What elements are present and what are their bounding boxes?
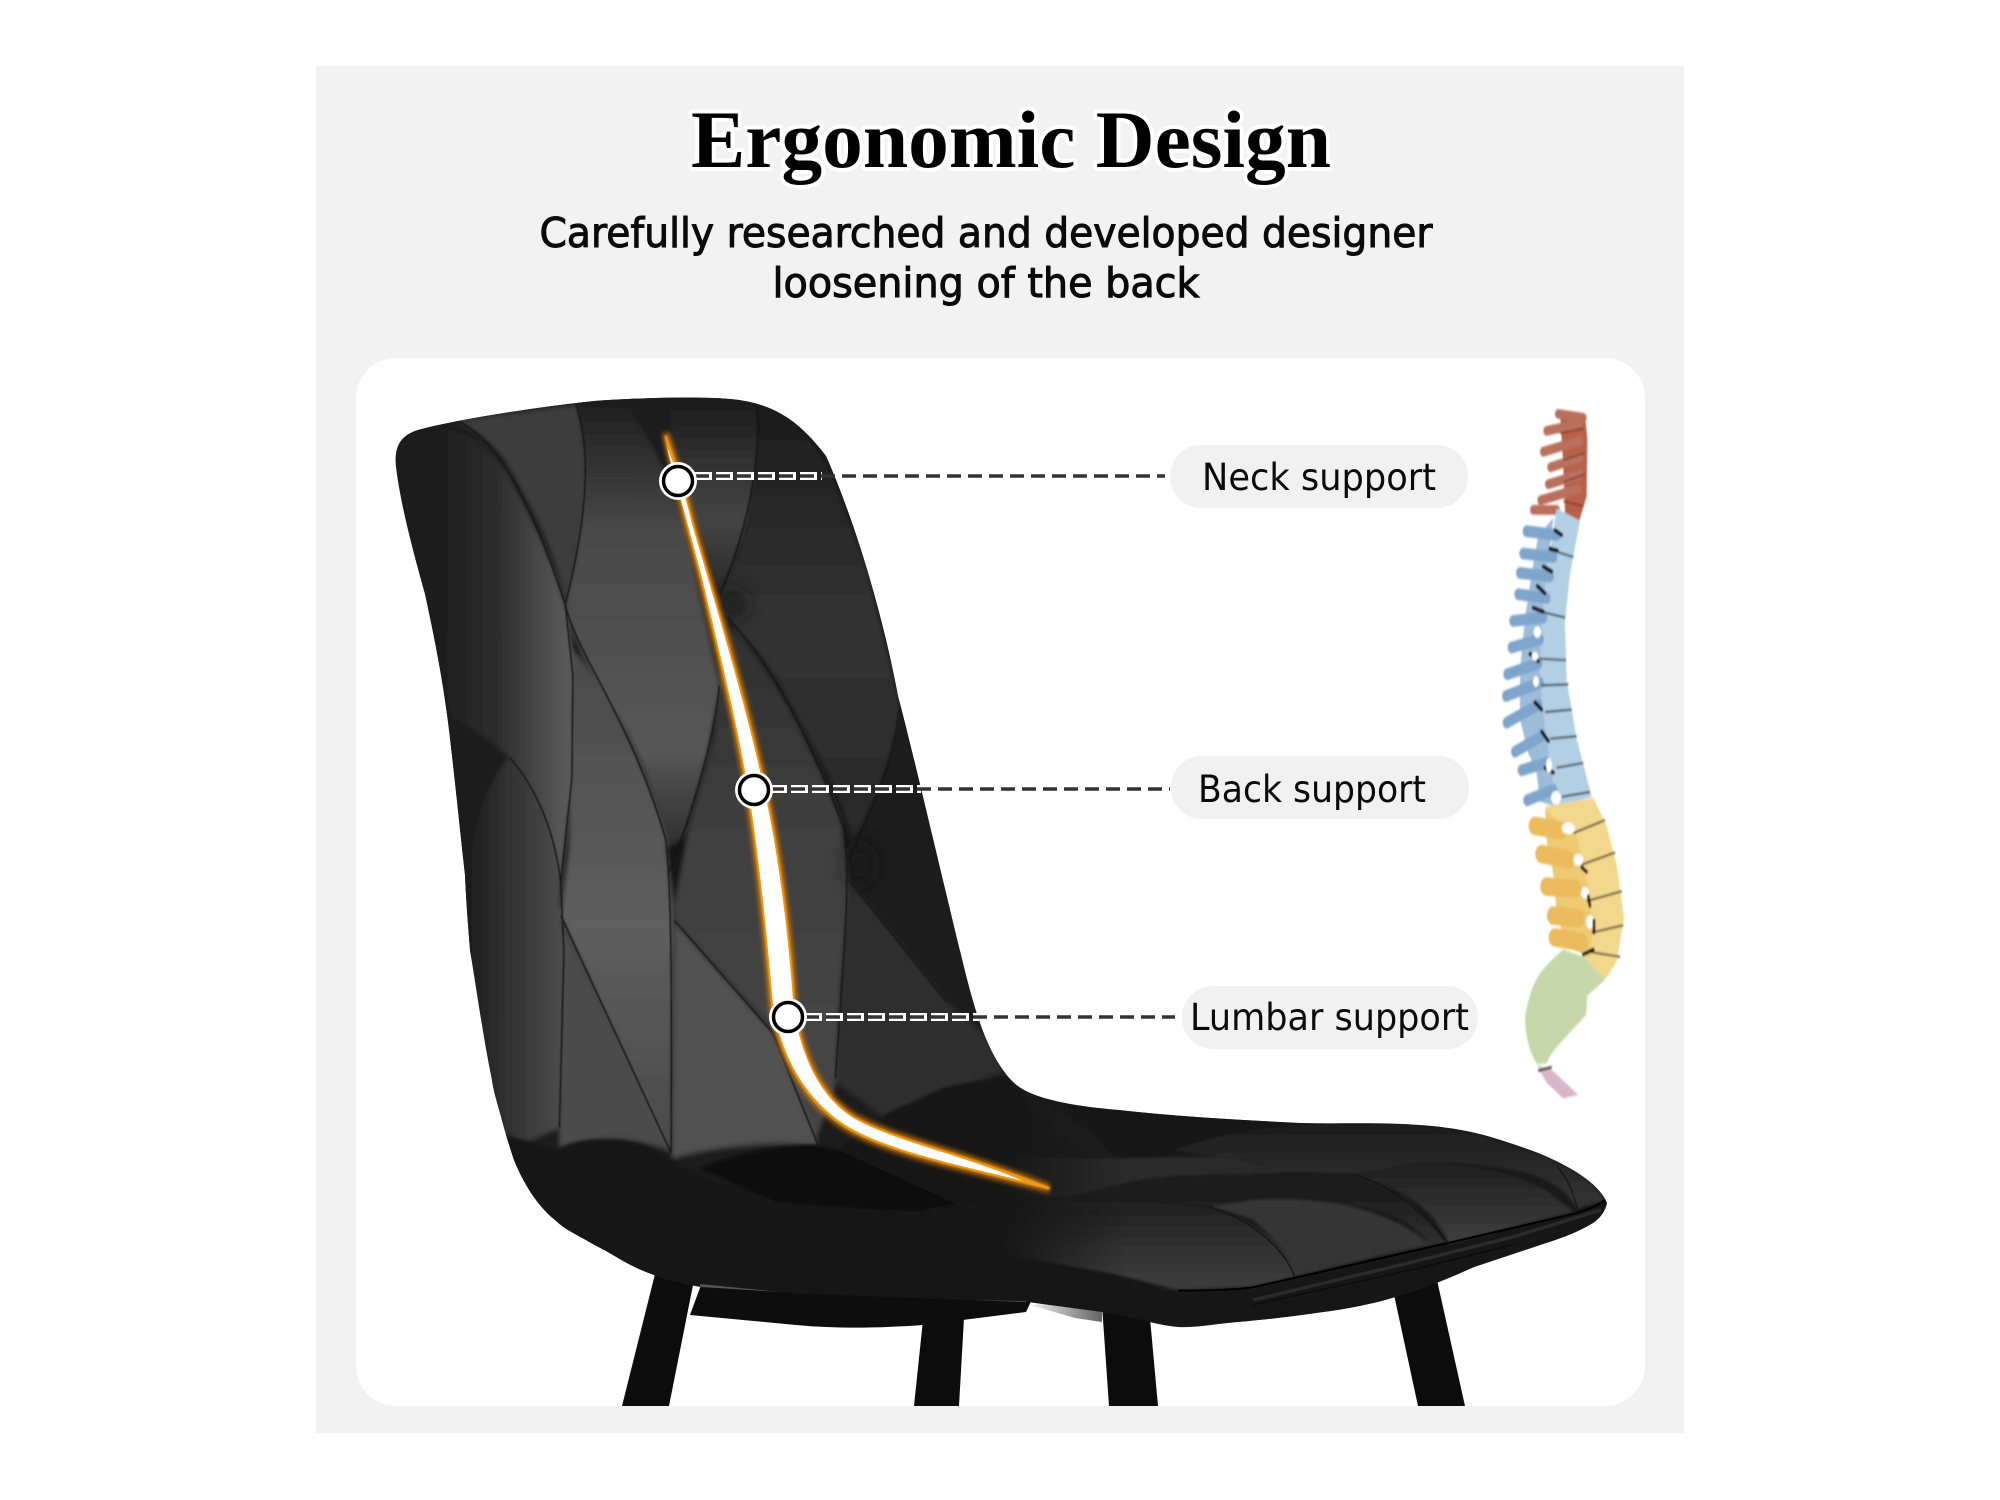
marker: back <box>735 771 773 809</box>
tuft shadows <box>722 588 851 886</box>
chair back panels <box>376 385 1023 1186</box>
panel: white content card <box>356 358 1645 1406</box>
icon: spine diagram <box>1506 410 1624 1098</box>
spine highlight line <box>666 433 1050 1188</box>
seat piping <box>1178 1167 1605 1305</box>
label: neck support: Neck support <box>1202 456 1436 499</box>
chair illustration <box>376 380 1620 1406</box>
label: neck support <box>1170 445 1468 508</box>
thoracic vertebrae <box>1506 508 1592 807</box>
callout line: back <box>770 785 1170 793</box>
marker: lumbar <box>769 998 807 1036</box>
callout line: lumbar <box>805 1013 1175 1021</box>
seat underside edge <box>700 1286 1026 1303</box>
background panel <box>316 66 1684 1433</box>
coccyx <box>1537 1066 1578 1098</box>
title: Ergonomic Design <box>691 94 1331 185</box>
subtitle: Carefully researched and developed designer <box>540 209 1433 257</box>
seat left panels <box>506 1076 1154 1323</box>
subtitle: loosening of the back <box>772 259 1200 307</box>
under-seat frame <box>690 1285 1102 1328</box>
lumbar vertebrae <box>1535 798 1624 980</box>
chair legs <box>622 1270 1465 1406</box>
label: back support: Back support <box>1198 768 1426 811</box>
label: back support <box>1171 756 1469 819</box>
sacrum <box>1525 950 1605 1064</box>
cervical vertebrae <box>1533 410 1587 521</box>
label: lumbar support <box>1182 986 1478 1049</box>
callout line: neck <box>695 472 1165 480</box>
marker: neck <box>659 462 697 500</box>
seat right panels <box>1024 1090 1607 1326</box>
label: lumbar support: Lumbar support <box>1190 996 1469 1039</box>
chair body <box>376 380 1620 1347</box>
upholstery seams <box>456 405 947 1153</box>
subtitle <box>540 209 1433 307</box>
